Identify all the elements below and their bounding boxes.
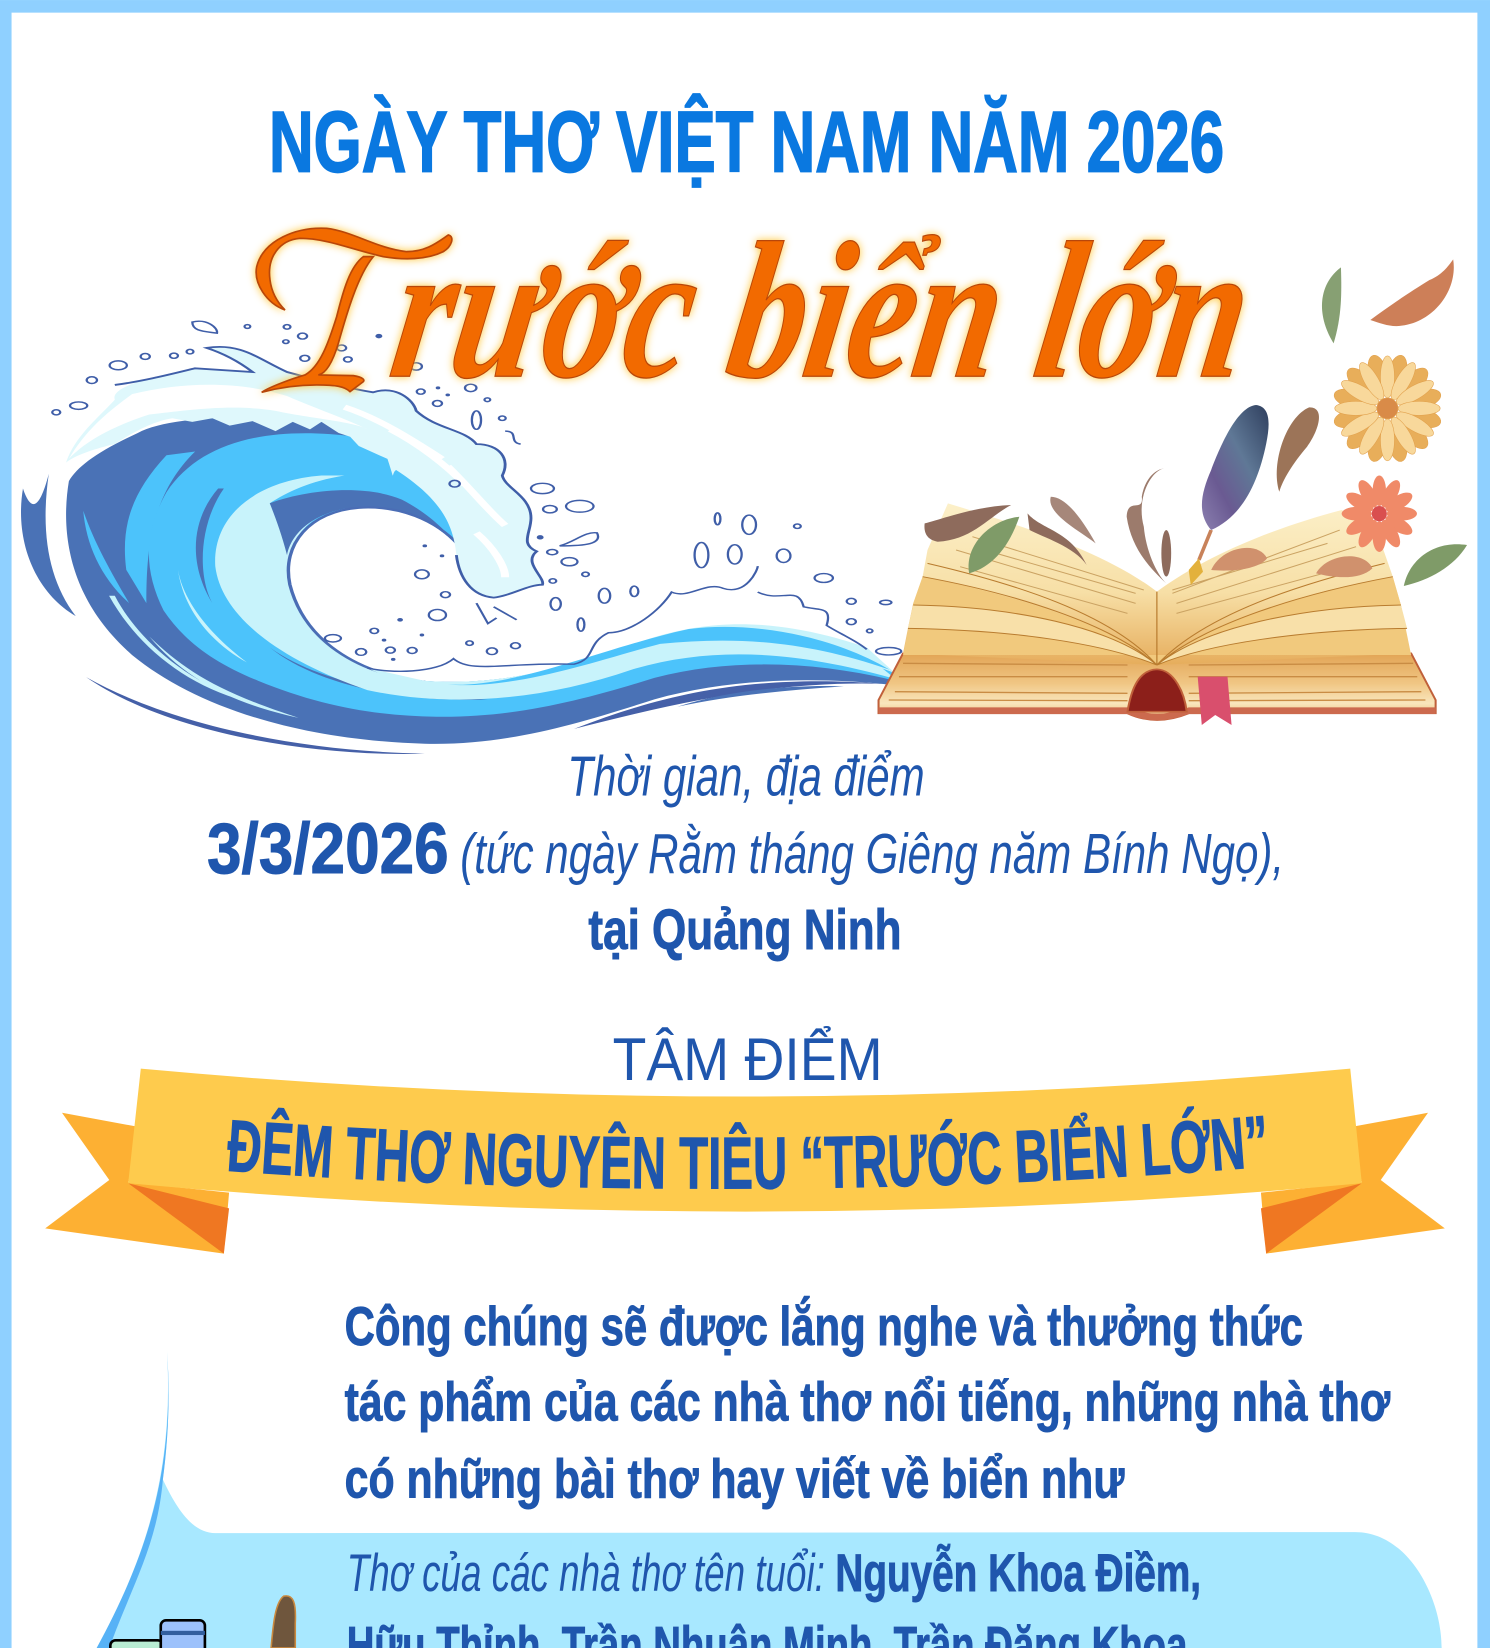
- place: tại Quảng Ninh: [588, 899, 902, 962]
- book with feather, flowers and leaves: [879, 259, 1467, 725]
- ribbon banner: [45, 1068, 1445, 1254]
- panel: poets: [97, 1351, 1442, 1648]
- wave illustration: [21, 321, 901, 754]
- intro text: có những bài thơ hay viết về biển như: [345, 1448, 1125, 1509]
- heading: Tâm điểm: TÂM ĐIỂM: [613, 1026, 883, 1093]
- icon: books and pen: [110, 1596, 295, 1648]
- date: 3/3/2026: [207, 809, 449, 889]
- poets lead-in: Thơ của các nhà thơ tên tuổi:: [347, 1544, 825, 1603]
- poet name: Nguyễn Khoa Điềm,: [835, 1544, 1201, 1603]
- ribbon text: ĐÊM THƠ NGUYÊN TIÊU “TRƯỚC BIỂN LỚN”: [227, 1106, 1264, 1190]
- title: Trước biển lớn: rước biển lớn: [380, 202, 1265, 419]
- intro text: [345, 1295, 1390, 1509]
- time and place heading: Thời gian, địa điểm: [567, 745, 925, 808]
